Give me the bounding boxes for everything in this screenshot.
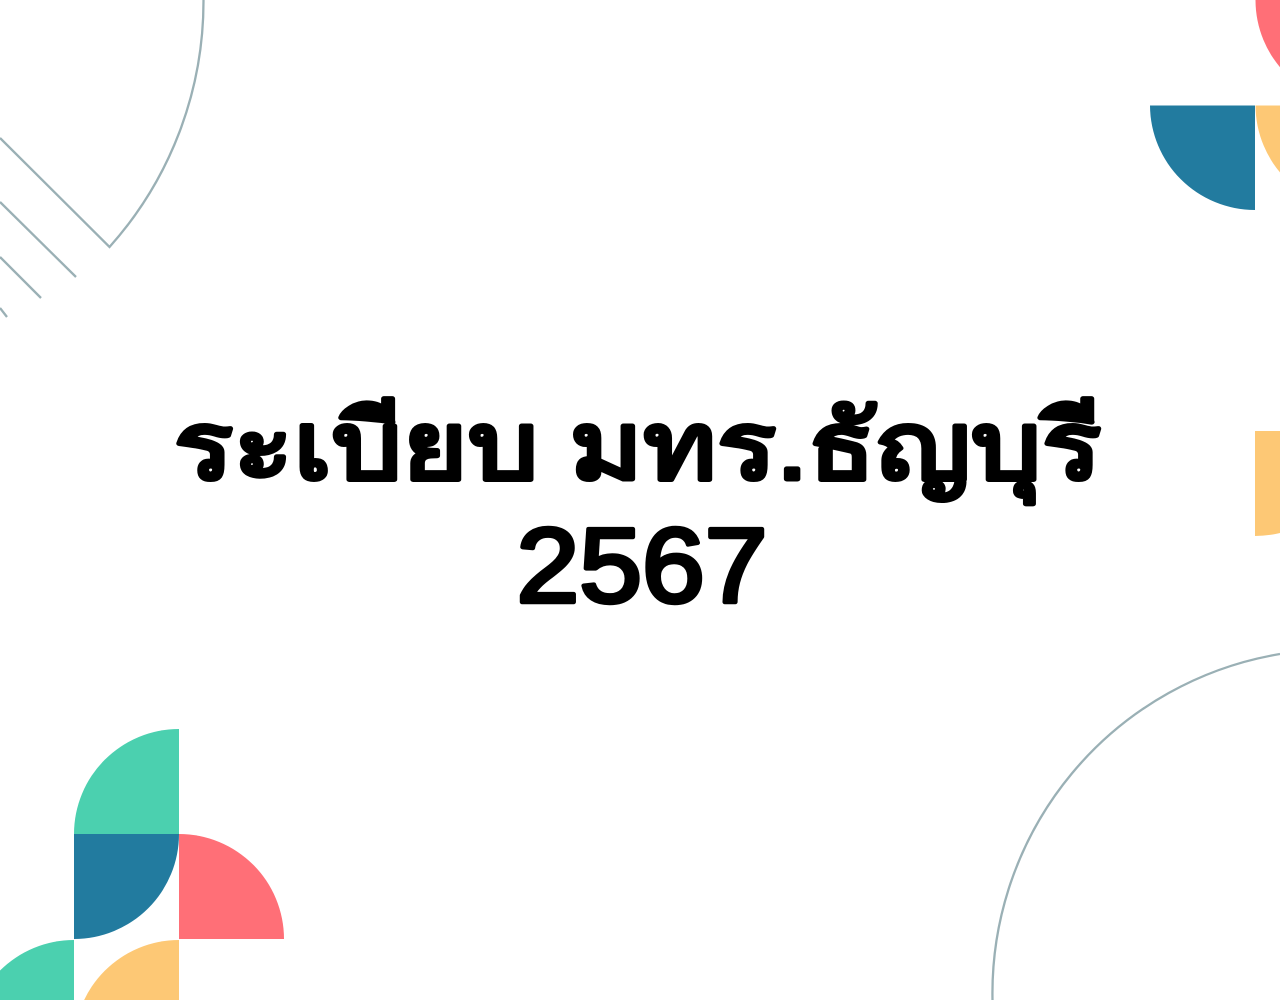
decorative outline: top-left arc and diagonal lines: [0, 0, 204, 317]
title: 2567: [516, 507, 768, 625]
title: ระเบียบ มทร.ธัญบุรี: [174, 394, 1102, 504]
decorative shapes: top-right quarter circles: [1150, 0, 1280, 210]
decorative outline: bottom-right arc: [992, 654, 1280, 1000]
decorative shape: right edge yellow quarter circle: [1255, 431, 1280, 536]
title: [174, 394, 1102, 625]
decorative shapes: bottom-left quarter circles: [0, 729, 284, 1000]
